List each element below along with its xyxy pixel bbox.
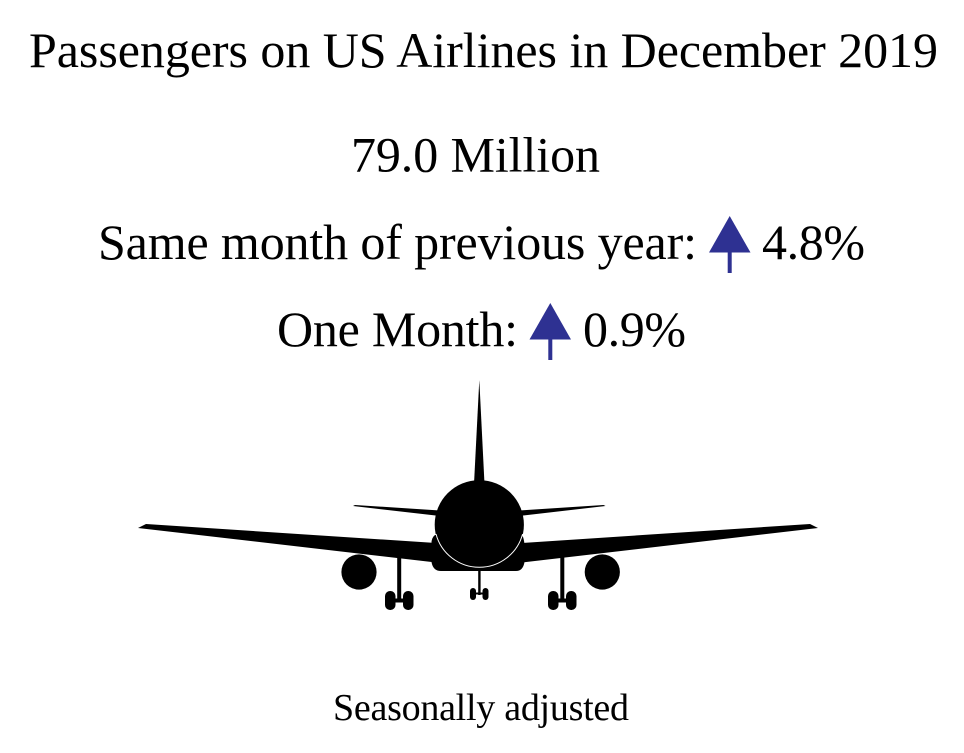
footnote: Seasonally adjusted <box>333 687 629 729</box>
fuselage <box>435 480 524 569</box>
right wing <box>522 524 818 562</box>
headline number: passengers: 79.0 Million <box>351 126 600 182</box>
icon: airplane front view <box>138 380 818 610</box>
fuselage belly <box>431 535 524 571</box>
left landing gear <box>385 557 414 610</box>
icon: up arrow, year change <box>709 216 750 273</box>
label: one month: One Month: <box>277 301 518 357</box>
stat: same month of previous year <box>98 214 865 273</box>
icon: up arrow, month change <box>530 303 571 360</box>
left engine <box>341 554 377 590</box>
left wing <box>138 524 436 562</box>
title: Passengers on US Airlines in December 2019 <box>29 22 938 78</box>
fuselage highlight <box>436 534 523 567</box>
nose landing gear <box>470 570 488 600</box>
right stabilizer <box>519 505 606 516</box>
value: month change: 0.9% <box>583 301 686 357</box>
tail fin <box>474 380 484 484</box>
stat: one month <box>277 301 686 360</box>
right landing gear <box>548 557 576 610</box>
value: year change: 4.8% <box>762 214 865 270</box>
left stabilizer <box>353 505 440 516</box>
right engine <box>585 554 620 590</box>
label: same month of previous year: Same month of previous year: <box>98 214 697 270</box>
